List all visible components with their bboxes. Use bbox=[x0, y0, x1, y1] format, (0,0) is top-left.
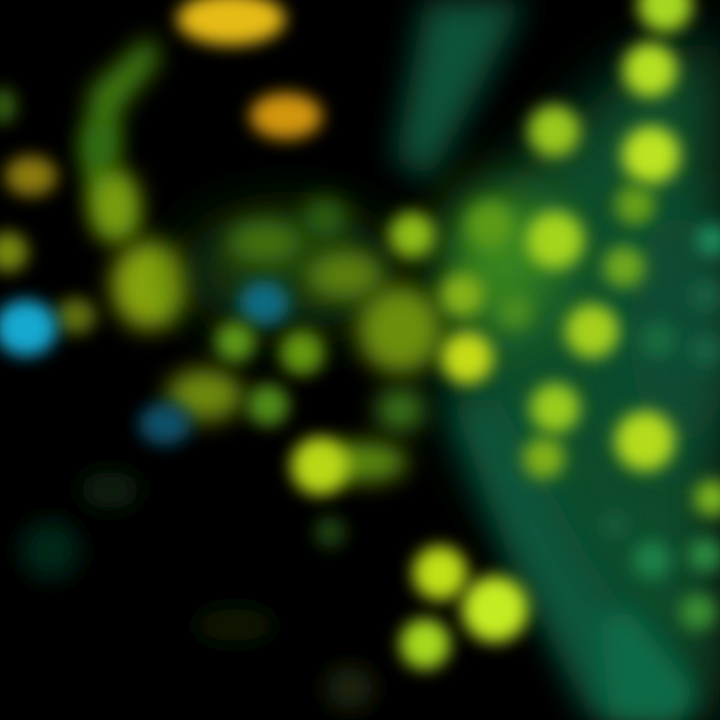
yellow and orange lights bbox=[0, 0, 322, 334]
background: green light beams bbox=[395, 0, 720, 720]
faint lower-left glows bbox=[20, 472, 374, 710]
dim green nodes bbox=[601, 224, 720, 630]
bright green-yellow nodes bbox=[215, 0, 720, 669]
blue lights bbox=[0, 281, 289, 445]
left cluster: olive glow haze bbox=[82, 35, 442, 482]
